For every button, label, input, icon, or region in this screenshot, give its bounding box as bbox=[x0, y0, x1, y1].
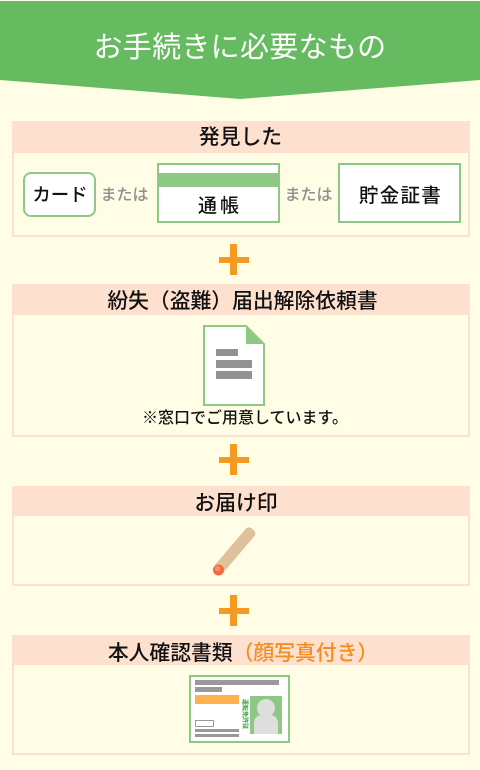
panel: 発見した bbox=[12, 121, 470, 236]
option: 貯金証書: 貯金証書 bbox=[359, 185, 442, 207]
title banner bbox=[0, 1, 480, 99]
icon: seal stamp bbox=[213, 527, 255, 576]
heading: 本人確認書類(顔写真付き): 本人確認書類（顔写真付き） bbox=[108, 642, 378, 665]
icon: ID card bbox=[190, 676, 289, 742]
panel: 本人確認書類 bbox=[12, 635, 470, 754]
note: ※窓口でご用意しています。 bbox=[142, 409, 348, 427]
option: カード: カード bbox=[32, 184, 88, 205]
heading: 紛失(盗難)届出解除依頼書: 紛失（盗難）届出解除依頼書 bbox=[107, 290, 378, 313]
plus icon bbox=[219, 244, 249, 275]
separator text: または: または bbox=[100, 186, 149, 204]
separator text: または: または bbox=[284, 186, 333, 204]
option: 通帳 bbox=[158, 164, 279, 222]
icon: ID card: 運転免許証 bbox=[241, 699, 249, 729]
panel: お届け印 bbox=[12, 486, 470, 585]
icon: document bbox=[204, 325, 265, 405]
heading: お届け印: お届け印 bbox=[194, 492, 278, 515]
panel: 届出書 bbox=[12, 284, 470, 436]
plus icon bbox=[219, 444, 249, 475]
option: 通帳: 通帳 bbox=[198, 195, 242, 217]
option: カード bbox=[24, 173, 95, 216]
title banner: お手続きに必要なもの bbox=[93, 31, 387, 64]
option: 貯金証書 bbox=[339, 164, 460, 222]
plus icon bbox=[219, 595, 249, 626]
heading: 発見した: 発見した bbox=[199, 126, 282, 149]
